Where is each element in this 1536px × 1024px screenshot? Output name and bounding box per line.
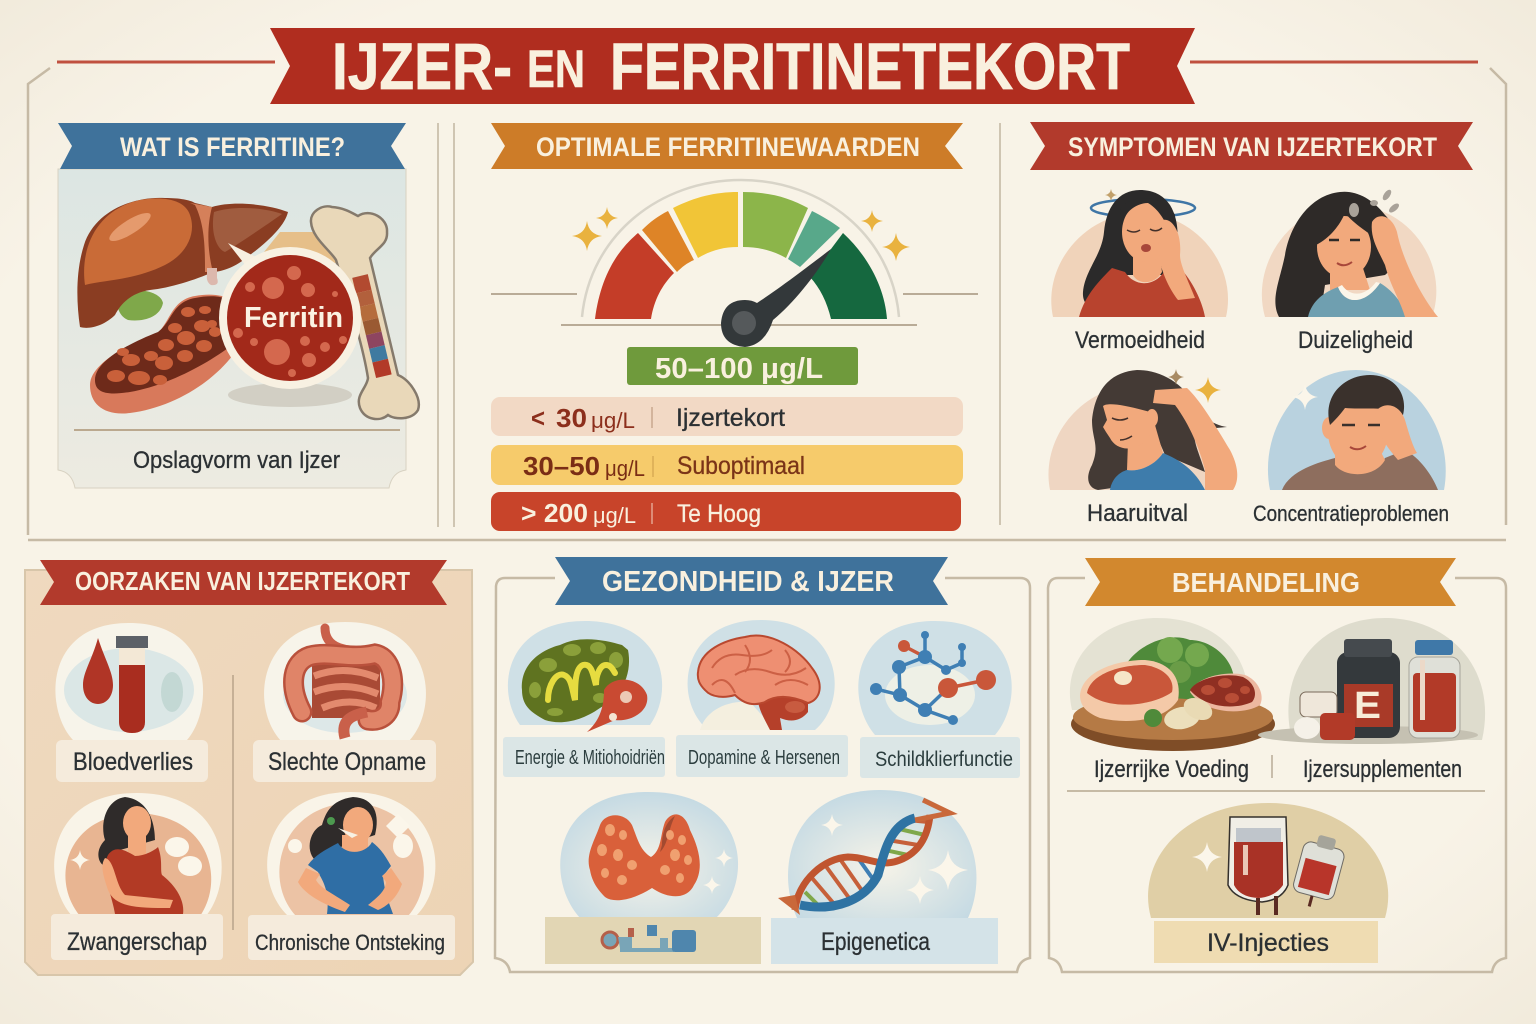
- label: dopamine: Dopamine & Hersenen: [688, 747, 840, 769]
- heading: symptomen: [1030, 122, 1473, 170]
- optimal value label: [627, 347, 858, 385]
- row: suboptimal range: [491, 445, 963, 485]
- heading: symptomen: SYMPTOMEN VAN IJZERTEKORT: [1068, 132, 1437, 162]
- treatment: iv-injecties: [1148, 803, 1388, 963]
- label: duizeligheid: Duizeligheid: [1298, 327, 1413, 354]
- row: low range: <: [531, 403, 545, 433]
- cause: zwangerschap: [51, 793, 223, 960]
- heading: behandeling: [1085, 558, 1456, 606]
- heading: behandeling: BEHANDELING: [1172, 567, 1360, 598]
- label: bloedverlies: [56, 740, 208, 782]
- row: low range: μg/L: [591, 408, 635, 433]
- illustration: liver: [77, 198, 345, 328]
- panel: wat is ferritine: [58, 123, 419, 488]
- topic: dopamine en hersenen: [676, 620, 848, 777]
- row: low range: Ijzertekort: [676, 404, 785, 432]
- symptom: duizeligheid: [1262, 188, 1438, 354]
- row: low range: 30: [556, 403, 587, 433]
- title banner: [270, 28, 1195, 104]
- symptom: concentratieproblemen: [1253, 370, 1449, 526]
- symptom: haaruitval: [1048, 369, 1237, 527]
- heading: optimale ferritinewaarden: [491, 123, 963, 169]
- panel: optimale ferritinewaarden: [491, 123, 978, 531]
- gauge needle: [721, 249, 831, 347]
- row: high range: μg/L: [593, 503, 636, 528]
- row: low range: [491, 397, 963, 436]
- sparkles: [572, 207, 910, 261]
- label: epigenetica: Epigenetica: [821, 928, 930, 956]
- label: ijzersupplementen: Ijzersupplementen: [1303, 756, 1462, 783]
- label: iv-injecties: IV-Injecties: [1207, 929, 1329, 957]
- cause: bloedverlies: [55, 623, 208, 782]
- row: suboptimal range: μg/L: [605, 456, 645, 481]
- label: iv-injecties: [1154, 921, 1378, 963]
- heading: oorzaken: [40, 560, 447, 605]
- row: high range: Te Hoog: [677, 500, 761, 528]
- label: vermoeidheid: Vermoeidheid: [1075, 327, 1205, 354]
- heading: gezondheid: [555, 557, 948, 605]
- topic: thyroid gland: [545, 792, 761, 964]
- heading: oorzaken: OORZAKEN VAN IJZERTEKORT: [75, 566, 410, 596]
- cause: slechte opname: [253, 622, 436, 782]
- row: suboptimal range: Suboptimaal: [677, 452, 805, 480]
- cause: chronische ontsteking: [248, 792, 455, 960]
- label: schildklierfunctie: Schildklierfunctie: [875, 748, 1013, 771]
- treatment: ijzersupplementen: E: [1354, 685, 1381, 727]
- label: bloedverlies: Bloedverlies: [73, 748, 193, 776]
- optimal value label: 50–100 μg/L: [655, 353, 823, 385]
- panel: symptomen: [1030, 122, 1473, 527]
- caption: opslagvorm: Opslagvorm van Ijzer: [133, 447, 340, 474]
- label: energie: [503, 737, 665, 777]
- treatment: ijzerrijke voeding: [1070, 618, 1275, 783]
- title banner: IJZER-: [332, 29, 512, 103]
- symptom: vermoeidheid: [1051, 189, 1228, 354]
- topic: energie en mitochondriën: [503, 621, 665, 777]
- panel: behandeling: [1048, 558, 1506, 972]
- label: dopamine: [676, 735, 848, 777]
- title banner: FERRITINETEKORT: [610, 29, 1130, 103]
- treatment: ijzersupplementen: [1258, 618, 1485, 783]
- topic: epigenetica dna: [771, 790, 998, 964]
- row: suboptimal range: 30–50: [523, 451, 600, 481]
- illustration: ferritin circle: Ferritin: [244, 302, 343, 334]
- label: chronische ontsteking: Chronische Ontsteking: [255, 930, 445, 955]
- label with machine icon: [545, 917, 761, 964]
- title banner: EN: [527, 40, 585, 99]
- topic: schildklierfunctie molecule: [858, 621, 1020, 778]
- panel: oorzaken: [25, 560, 473, 975]
- label: zwangerschap: [51, 914, 223, 960]
- label: zwangerschap: Zwangerschap: [67, 928, 207, 956]
- heading: gezondheid: GEZONDHEID & IJZER: [602, 566, 894, 598]
- heading: wat is ferritine: [58, 123, 406, 169]
- row: high range: > 200: [521, 498, 588, 528]
- panel: gezondheid en ijzer: [495, 557, 1030, 972]
- label: epigenetica: [771, 918, 998, 964]
- row: high range: [491, 492, 961, 531]
- label: slechte opname: [253, 740, 436, 782]
- heading: optimale ferritinewaarden: OPTIMALE FERRITINEWAARDEN: [536, 132, 920, 162]
- illustration: bone with marrow: [311, 206, 419, 419]
- label: slechte opname: Slechte Opname: [268, 748, 426, 776]
- label: chronische ontsteking: [248, 915, 455, 960]
- label: haaruitval: Haaruitval: [1087, 500, 1188, 527]
- illustration: ferritin circle: [219, 243, 361, 407]
- label: energie: Energie & Mitiohoidriën: [515, 747, 665, 769]
- label: ijzerrijke voeding: Ijzerrijke Voeding: [1094, 756, 1249, 783]
- illustration: iron tissue slice: [90, 295, 233, 413]
- label: schildklierfunctie: [860, 737, 1020, 778]
- label: concentratieproblemen: Concentratieproblemen: [1253, 501, 1449, 526]
- gauge chart: [491, 180, 978, 347]
- heading: wat is ferritine: WAT IS FERRITINE?: [120, 132, 345, 162]
